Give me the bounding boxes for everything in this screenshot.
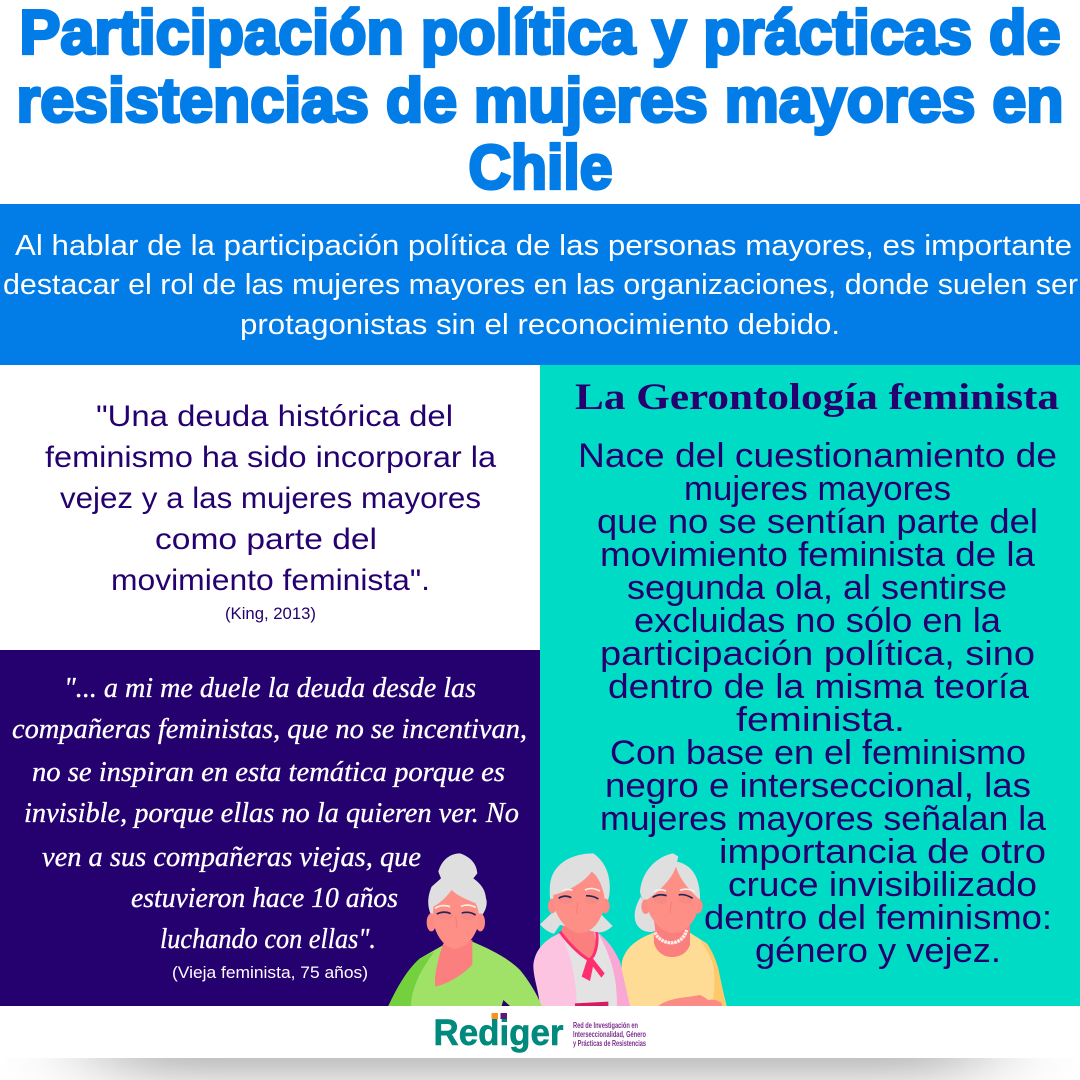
panel: testimony <box>0 650 540 1006</box>
citation: King: (King, 2013) <box>225 604 316 623</box>
intro text <box>3 230 1078 341</box>
intro text: Al hablar de la participación política de las personas mayores, es importante <box>15 230 1072 262</box>
panel: introduction band <box>0 204 1080 365</box>
testimony text: "... a mi me duele la deuda desde las <box>64 672 476 704</box>
logo tagline <box>573 1021 646 1048</box>
panel body text <box>578 437 1057 970</box>
title: Chile <box>468 134 612 202</box>
panel body text: negro e interseccional, las <box>605 767 1031 805</box>
testimony text: no se inspiran en esta temática porque es <box>32 756 505 788</box>
logo tagline: y Prácticas de Resistencias <box>573 1039 646 1048</box>
citation: testimony: (Vieja feminista, 75 años) <box>172 963 368 982</box>
title <box>16 0 1064 202</box>
panel body text: género y vejez. <box>755 932 1001 970</box>
panel: King quote <box>0 365 540 650</box>
woman: green sweater <box>388 853 542 1006</box>
intro text: protagonistas sin el reconocimiento debido. <box>240 309 840 341</box>
logo wordmark: Rediger <box>434 1012 564 1053</box>
panel body text: que no se sentían parte del <box>597 503 1038 541</box>
panel body text: participación política, sino <box>600 635 1035 673</box>
testimony text: invisible, porque ellas no la quieren ver. No <box>24 797 519 829</box>
testimony text: ven a sus compañeras viejas, que <box>42 841 421 873</box>
panel heading: La Gerontología feminista <box>575 377 1059 418</box>
panel: feminist gerontology <box>540 365 1080 1006</box>
panel body text: dentro de la misma teoría <box>608 668 1029 706</box>
woman: yellow sweater with pearls <box>621 853 727 1006</box>
bottom shadow <box>46 1058 1034 1080</box>
testimony text: estuvieron hace 10 años <box>131 882 398 914</box>
quote text: feminismo ha sido incorporar la <box>45 441 496 474</box>
logo tagline: Interseccionalidad, Género <box>573 1030 646 1039</box>
quote text: vejez y a las mujeres mayores <box>60 482 481 515</box>
logo: Rediger <box>434 1012 646 1053</box>
illustration: three older women <box>388 853 727 1006</box>
panel body text: Nace del cuestionamiento de <box>578 437 1057 475</box>
testimony text: compañeras feministas, que no se incentivan, <box>12 713 527 745</box>
intro text: destacar el rol de las mujeres mayores en las organizaciones, donde suelen ser <box>3 269 1078 301</box>
panel body text: mujeres mayores señalan la <box>600 800 1046 838</box>
testimony text: luchando con ellas". <box>160 923 376 955</box>
woman: pink cardigan <box>533 853 630 1006</box>
logo tagline: Red de Investigación en <box>573 1021 638 1030</box>
panel body text: mujeres mayores <box>684 470 951 508</box>
title: resistencias de mujeres mayores en <box>16 66 1064 136</box>
quote text <box>45 400 496 597</box>
quote text: "Una deuda histórica del <box>96 400 453 433</box>
panel body text: Con base en el feminismo <box>610 734 1026 772</box>
quote text: como parte del <box>155 523 377 556</box>
panel body text: excluidas no sólo en la <box>634 602 1001 640</box>
panel body text: dentro del feminismo: <box>704 899 1052 937</box>
panel body text: importancia de otro <box>719 833 1046 871</box>
testimony text <box>12 672 527 955</box>
panel body text: cruce invisibilizado <box>728 866 1037 904</box>
panel body text: movimiento feminista de la <box>600 536 1035 574</box>
panel body text: feminista. <box>736 701 905 739</box>
quote text: movimiento feminista". <box>111 564 430 597</box>
title: Participación política y prácticas de <box>20 0 1060 68</box>
panel body text: segunda ola, al sentirse <box>627 569 1007 607</box>
